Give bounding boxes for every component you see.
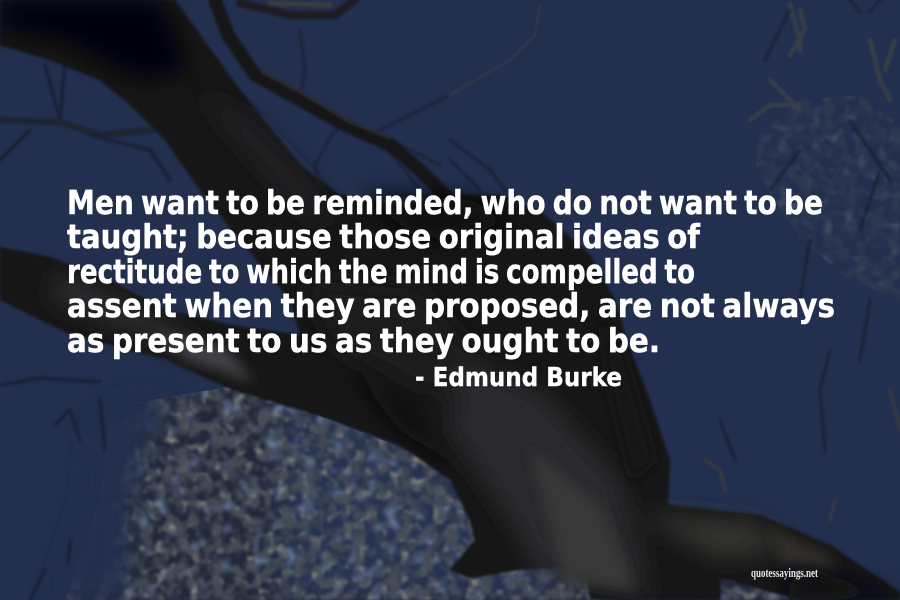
lower foliage	[66, 387, 795, 600]
right foliage	[756, 96, 900, 295]
trunk highlights	[150, 320, 840, 590]
quote text: taught; because those original ideas of	[67, 217, 701, 256]
quote text	[67, 183, 835, 360]
quote text: rectitude to which the mind is compelled to	[67, 252, 695, 291]
quote text: as present to us as they ought to be.	[67, 321, 660, 360]
foliage left fade	[50, 395, 170, 600]
site credit: quotessayings.net	[751, 565, 818, 580]
attribution: - Edmund Burke	[415, 363, 622, 393]
thin branch and top arc	[215, 0, 455, 205]
